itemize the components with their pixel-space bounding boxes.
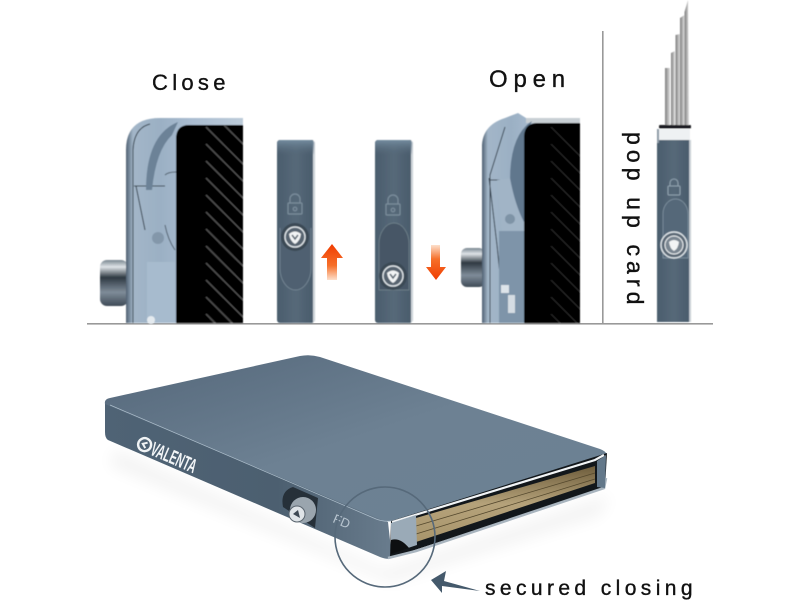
panel: open mechanism detail xyxy=(460,112,581,324)
metal housing, open xyxy=(482,113,580,323)
stacked cards xyxy=(665,0,689,126)
arrow: points to circle xyxy=(431,571,480,593)
wallet top face xyxy=(105,355,606,522)
icon: padlock xyxy=(668,179,680,195)
slider track xyxy=(280,228,311,290)
baseline and divider lines xyxy=(87,31,713,325)
icon: slider knob, close xyxy=(100,260,128,306)
icon: slider button xyxy=(379,262,407,290)
card stack xyxy=(416,466,595,542)
metal housing, close xyxy=(126,118,243,323)
icon: slider button xyxy=(281,223,309,251)
panel: close mechanism detail xyxy=(99,118,244,324)
brand logo and name: VALENTA xyxy=(147,439,200,478)
vertical label: pop up card: pop up card xyxy=(622,132,648,310)
heading: Open: Open xyxy=(489,66,571,93)
icon: padlock xyxy=(288,194,302,214)
corner latch xyxy=(391,515,417,551)
icon: slider knob, open xyxy=(461,248,485,287)
panel: pop up cards view xyxy=(657,0,691,322)
panel: wallet perspective photo xyxy=(105,355,610,582)
black card slot with stripes, close xyxy=(175,124,244,324)
icon: padlock xyxy=(386,195,400,215)
arrow: up xyxy=(321,244,343,280)
callout circle xyxy=(335,487,435,587)
wallet body, side view xyxy=(657,140,691,322)
panel: slim side view, open position xyxy=(375,140,413,323)
slider track xyxy=(663,199,688,258)
callout label: secured closing xyxy=(485,577,697,600)
infographic canvas xyxy=(87,0,713,600)
ground shadow xyxy=(110,450,610,582)
heading: Close: Close xyxy=(152,70,230,95)
icon: slider button xyxy=(661,232,687,258)
slider slot and knob xyxy=(282,487,318,528)
top edge highlight xyxy=(110,405,605,521)
wallet front side xyxy=(105,402,392,559)
slider track xyxy=(379,223,409,290)
arrow: down xyxy=(426,245,446,280)
brand logo and name xyxy=(134,433,200,478)
black card slot with stripes, open xyxy=(523,122,581,324)
panel: slim side view, close position xyxy=(277,140,315,323)
wallet open end xyxy=(390,453,607,558)
icon: padlock on side: FD xyxy=(331,511,353,532)
